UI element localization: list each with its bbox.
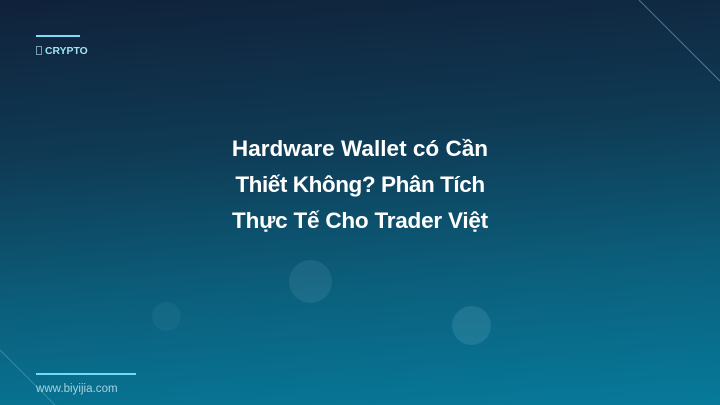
bottom accent line [36,373,136,375]
bubble: center [289,260,332,303]
top accent line [36,35,80,37]
title: Thiết Không? Phân Tích [235,172,485,197]
title: Thực Tế Cho Trader Việt [232,208,488,233]
website footer: www.biyijia.com [36,383,118,395]
category label: CRYPTO [45,46,88,57]
title: Hardware Wallet có Cần [232,136,488,161]
title [232,136,488,233]
icon: missing glyph box [36,46,42,54]
bubble: right [452,306,491,345]
bubble: left [152,302,181,331]
